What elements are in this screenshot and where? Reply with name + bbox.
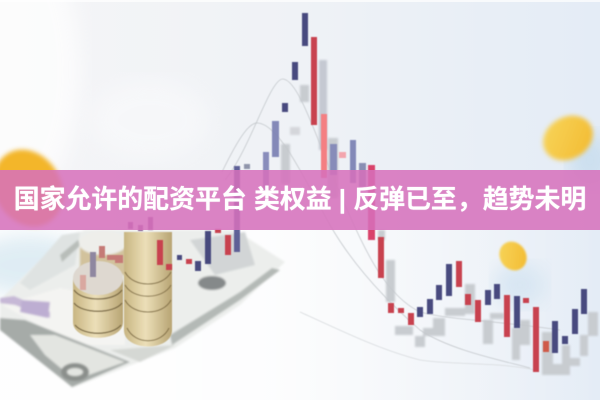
coin stack: left [73,261,123,338]
chart: blue candlesticks [177,13,587,353]
coin stack: right [124,232,172,346]
title: 国家允许的配资平台 类权益 | 反弹已至，趋势未明 [14,186,586,214]
banknotes [0,230,285,388]
chart: candlestick shadows [281,60,598,375]
icon: gold coin middle right [494,236,532,276]
chart: red candlesticks [80,37,549,372]
photo top edge highlight [0,0,600,2]
title band [0,170,600,230]
icon: gold coin top right [535,107,600,169]
coin stack: back [79,231,127,275]
icon: gold coin top left [0,137,77,239]
chart: moving average lines [222,79,560,370]
